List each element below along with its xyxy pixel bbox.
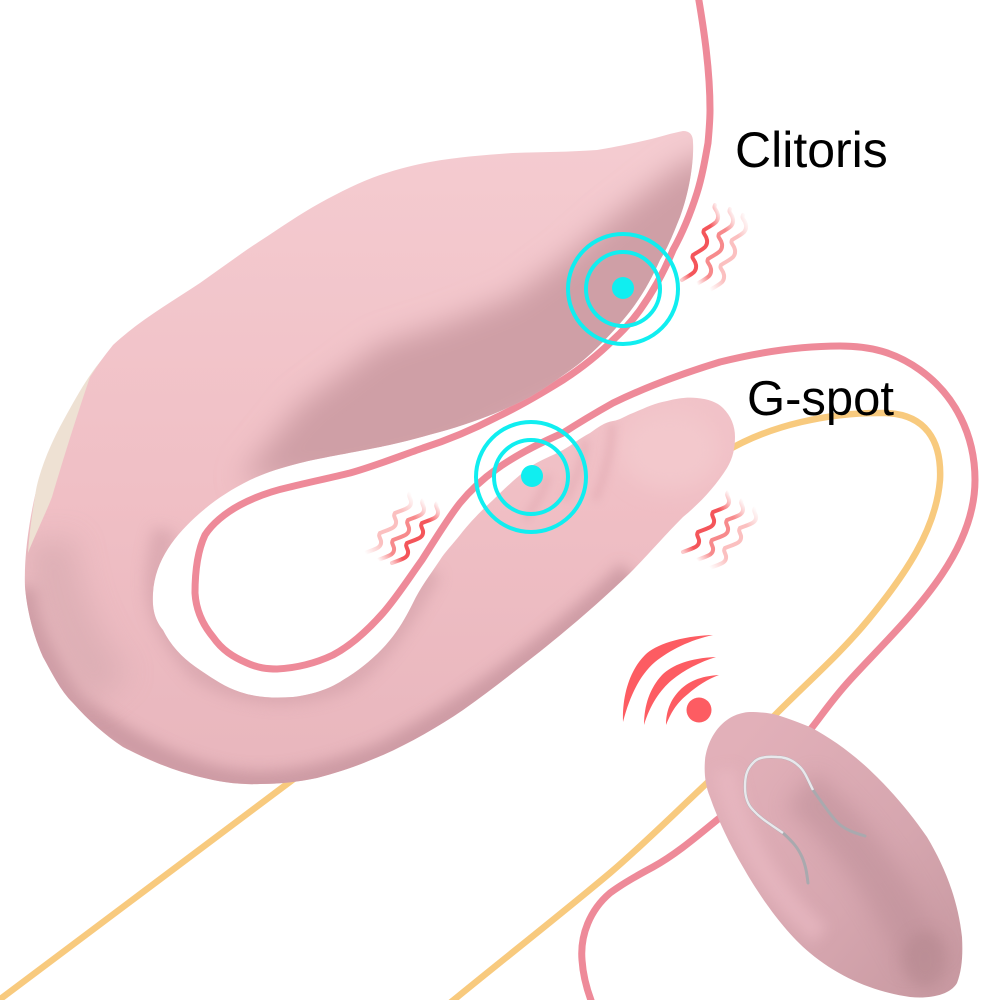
wireless signal icon: [623, 635, 719, 725]
pink outline curve: [195, 0, 975, 1000]
gold button strip: [28, 362, 100, 553]
remote body: [705, 712, 962, 997]
remote shading: [739, 778, 948, 986]
label: G-spot: G-spot: [747, 372, 894, 426]
label: Clitoris: Clitoris: [735, 122, 888, 178]
g-spot rings icon: [476, 422, 586, 532]
vibration waves left: [365, 493, 438, 563]
metal touch strip: [745, 757, 865, 883]
device body: [25, 131, 735, 784]
yellow antenna line, lower left: [0, 778, 295, 1000]
clitoris rings icon: [568, 234, 678, 344]
remote control: [705, 712, 962, 997]
vibration waves top: [682, 205, 746, 290]
body shading: [25, 150, 720, 784]
main body shape: [25, 131, 735, 784]
yellow antenna line, right: [450, 413, 940, 1000]
metal highlight: [745, 757, 813, 833]
vibration waves right: [683, 492, 756, 568]
